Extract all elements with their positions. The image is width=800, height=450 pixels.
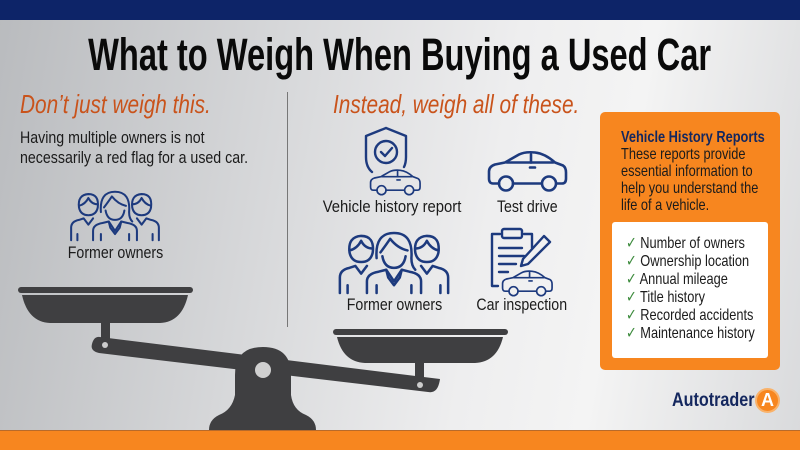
divider (287, 92, 288, 327)
label: test drive: Test drive (497, 198, 557, 216)
panel text: essential information to (621, 163, 753, 180)
label: former owners left: Former owners (67, 244, 163, 262)
checklist: ✓ Maintenance history (626, 325, 755, 342)
panel text: life of a vehicle. (621, 197, 709, 214)
checklist: ✓ Annual mileage (626, 271, 728, 288)
checklist: ✓ Number of owners (626, 235, 745, 252)
panel text: help you understand the (621, 180, 758, 197)
icon: former owners (right) (338, 232, 450, 294)
label: vehicle history report: Vehicle history report (323, 198, 461, 216)
text block: left: necessarily a red flag for a used car. (20, 148, 248, 167)
panel: vehicle history reports (600, 112, 780, 370)
icon: former owners (left) (70, 190, 160, 242)
heading: left: Don’t just weigh this. (20, 89, 211, 119)
label: former owners right: Former owners (346, 296, 442, 314)
logo: autotrader (672, 388, 780, 413)
text block: left: Having multiple owners is not (20, 128, 205, 147)
bottom bar (0, 430, 800, 450)
heading: right: Instead, weigh all of these. (333, 89, 579, 119)
panel heading: Vehicle History Reports (621, 129, 765, 146)
panel text: These reports provide (621, 146, 746, 163)
icon: car inspection (490, 228, 553, 296)
label: car inspection: Car inspection (477, 296, 567, 314)
text block: left (20, 128, 248, 167)
panel text (621, 146, 758, 214)
logo: autotrader: Autotrader (672, 390, 755, 411)
checklist: ✓ Recorded accidents (626, 307, 753, 324)
icon: vehicle history report (364, 126, 421, 196)
checklist (612, 222, 768, 358)
title: What to Weigh When Buying a Used Car (89, 29, 711, 80)
checklist: ✓ Title history (626, 289, 705, 306)
scale (18, 287, 508, 430)
top bar (0, 0, 800, 20)
logo: autotrader: A (761, 390, 774, 410)
checklist: ✓ Ownership location (626, 253, 749, 270)
icon: test drive (488, 151, 568, 192)
